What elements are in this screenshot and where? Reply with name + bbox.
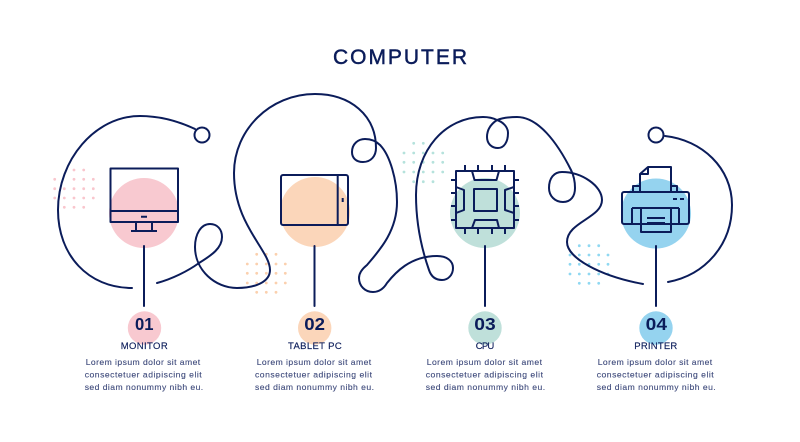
icon: monitor	[110, 168, 178, 231]
description	[255, 357, 374, 392]
number badge	[639, 311, 673, 345]
number: 02	[304, 314, 325, 334]
description: Lorem ipsum dolor sit amet	[598, 357, 713, 367]
main looping curve	[157, 94, 643, 292]
panel: cpu	[426, 165, 545, 392]
description	[85, 357, 203, 392]
number: 04	[646, 314, 667, 334]
description: sed diam nonummy nibh eu.	[426, 382, 545, 392]
label: CPU	[476, 341, 494, 352]
stem	[314, 246, 316, 306]
colour disc	[621, 178, 691, 248]
description: consectetuer adipiscing elit	[255, 370, 373, 380]
description	[426, 357, 545, 392]
description: sed diam nonummy nibh eu.	[85, 382, 203, 392]
description: consectetuer adipiscing elit	[85, 370, 202, 380]
end node	[648, 128, 664, 142]
number badge	[468, 311, 502, 345]
dot pattern: blue	[569, 244, 609, 285]
stem	[484, 246, 486, 306]
panel: tablet pc	[255, 175, 374, 392]
icon: tablet	[281, 175, 348, 225]
icon: cpu chip	[451, 165, 519, 234]
description	[597, 357, 716, 392]
curve around printer	[665, 136, 732, 282]
label: MONITOR	[121, 341, 168, 352]
description: sed diam nonummy nibh eu.	[255, 382, 374, 392]
dot pattern: teal	[403, 142, 444, 183]
number: 01	[135, 314, 154, 334]
label: PRINTER	[634, 341, 677, 352]
panel: monitor	[85, 168, 203, 392]
description: consectetuer adipiscing elit	[597, 370, 714, 380]
stem	[655, 246, 657, 306]
number badge	[298, 311, 331, 345]
number badge	[128, 311, 161, 345]
description: Lorem ipsum dolor sit amet	[427, 357, 543, 367]
icon: printer	[622, 167, 689, 232]
curve around monitor	[58, 116, 195, 288]
label: TABLET PC	[288, 341, 342, 352]
start node	[194, 128, 210, 142]
colour disc	[109, 178, 179, 248]
description: sed diam nonummy nibh eu.	[597, 382, 716, 392]
description: Lorem ipsum dolor sit amet	[257, 357, 372, 367]
title: COMPUTER	[333, 46, 467, 69]
stem	[143, 246, 145, 306]
panel: printer	[597, 167, 716, 392]
colour disc	[450, 178, 520, 248]
number: 03	[474, 314, 496, 334]
dot pattern: pink	[53, 169, 95, 209]
description: consectetuer adipiscing elit	[426, 370, 544, 380]
dot pattern: orange	[246, 253, 287, 294]
timeline curve	[58, 94, 732, 292]
description: Lorem ipsum dolor sit amet	[86, 357, 201, 367]
colour disc	[280, 177, 350, 247]
